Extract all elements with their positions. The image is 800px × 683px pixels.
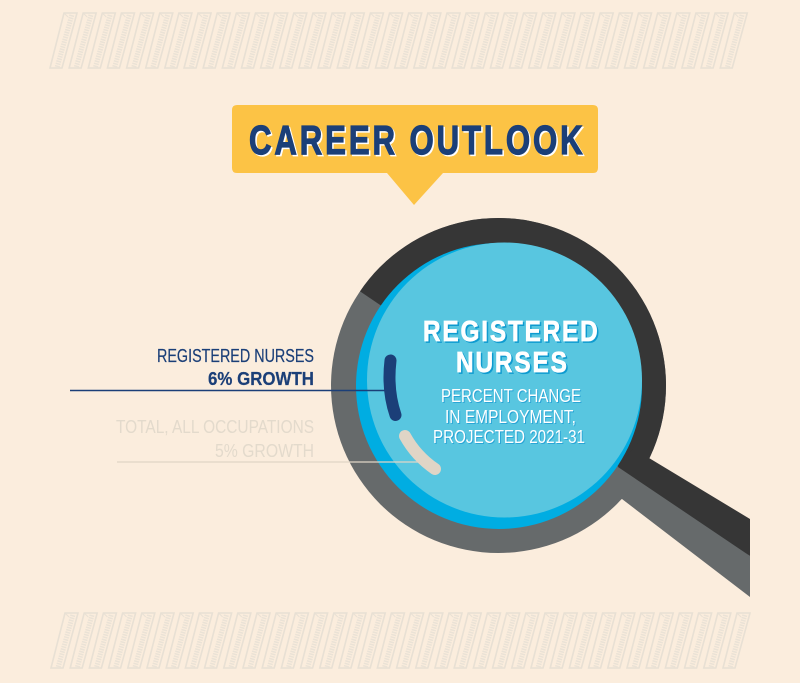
heading: registered nurses: NURSES (458, 348, 568, 380)
subheading: percent change: PERCENT CHANGE (441, 386, 581, 406)
top hatch band (50, 13, 747, 68)
marker: registered nurses arc (389, 360, 396, 415)
magnifying glass (331, 218, 750, 597)
ring: gray outer circle (331, 218, 666, 553)
lens: light blue face (367, 242, 642, 518)
title callout (232, 105, 598, 205)
ring: dark upper arc (360, 218, 666, 466)
subheading: percent change: PERCENT CHANGE (442, 387, 582, 407)
handle: dark upper part (618, 440, 750, 556)
heading: registered nurses (423, 315, 599, 380)
title: CAREER OUTLOOK (249, 117, 583, 163)
subheading: percent change: IN EMPLOYMENT, (446, 408, 577, 428)
subheading: percent change: PROJECTED 2021-31 (433, 427, 585, 447)
subheading: percent change: IN EMPLOYMENT, (445, 407, 576, 427)
label: total all occupations 5% growth: TOTAL, ALL OCCUPATIONS (116, 417, 314, 437)
leader line: total all occupations (117, 461, 422, 463)
label: total all occupations 5% growth: 5% GROWTH (215, 441, 314, 461)
lens: bright blue rim (356, 243, 642, 529)
handle: gray lower part (590, 440, 750, 597)
subheading: percent change (433, 386, 586, 448)
subheading: percent change: PROJECTED 2021-31 (434, 428, 586, 448)
heading: registered nurses: NURSES (456, 346, 567, 378)
label: total all occupations 5% growth (116, 417, 314, 461)
heading: registered nurses: REGISTERED (423, 315, 598, 347)
label: registered nurses 6% growth (157, 346, 314, 389)
title shadow: CAREER OUTLOOK (250, 118, 584, 165)
label: registered nurses 6% growth: REGISTERED NURSES (157, 346, 314, 366)
marker: total all occupations arc (405, 436, 435, 469)
heading: registered nurses: REGISTERED (424, 317, 599, 349)
leader line: registered nurses (70, 390, 388, 392)
label: registered nurses 6% growth: 6% GROWTH (208, 369, 314, 389)
bottom hatch band (51, 613, 750, 668)
